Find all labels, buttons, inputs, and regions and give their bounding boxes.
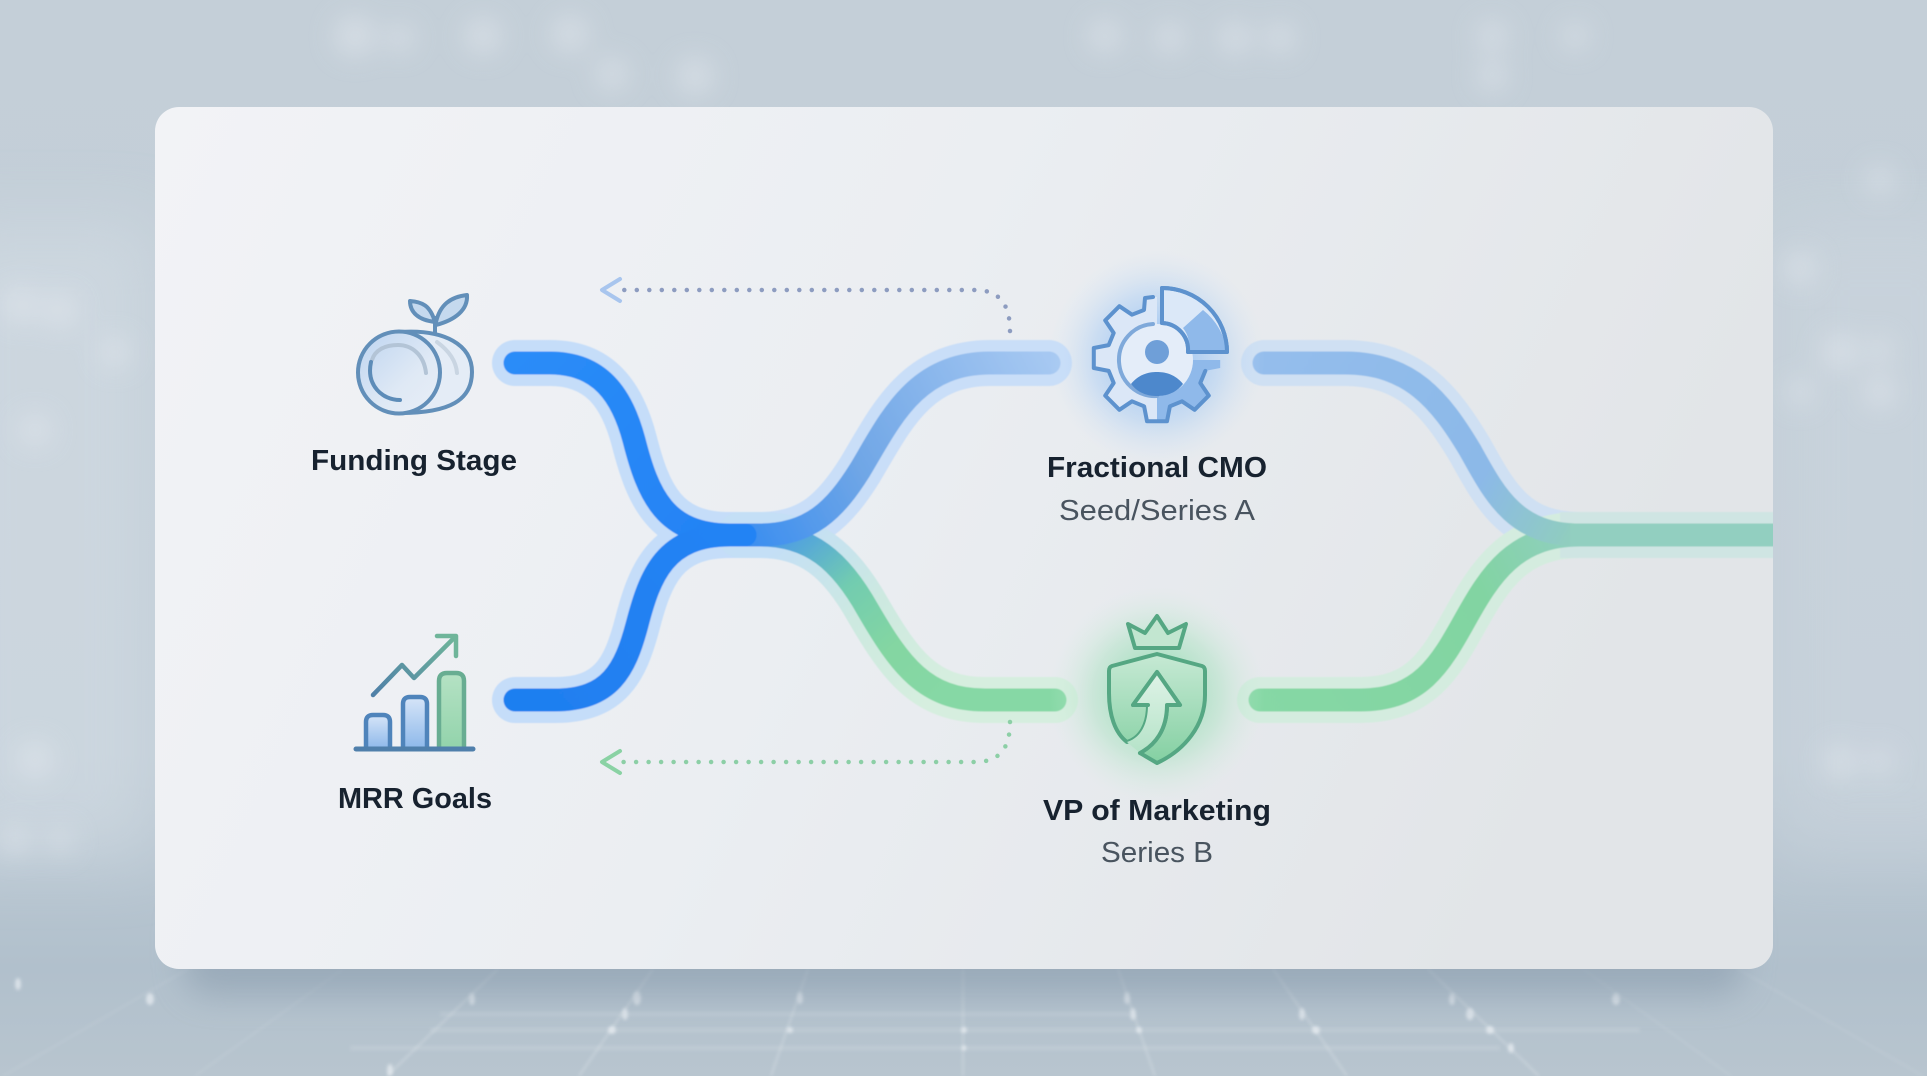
dotted return arrow: bottom	[602, 722, 1010, 773]
card shadow	[185, 900, 1743, 995]
glow: blue node	[1049, 250, 1265, 466]
label: MRR Goals: MRR Goals	[338, 783, 492, 815]
glow: green node	[1049, 587, 1265, 803]
main card panel	[155, 107, 1773, 969]
icon: shield with crown and arrow	[1109, 616, 1205, 763]
label: Seed/Series A: Seed/Series A	[1059, 495, 1256, 527]
flow diagram paths	[515, 363, 1790, 700]
icon: growth bars and arrow	[356, 636, 473, 749]
path halos	[515, 363, 1790, 700]
label: VP of Marketing: VP of Marketing	[1043, 795, 1271, 827]
path strokes	[515, 363, 1790, 700]
label: Fractional CMO: Fractional CMO	[1047, 452, 1267, 484]
gear body	[1094, 297, 1157, 421]
label: Series B: Series B	[1101, 837, 1213, 869]
dotted return arrow: top	[602, 279, 1010, 331]
label: Funding Stage: Funding Stage	[311, 445, 517, 477]
icon: peach with leaves	[358, 295, 472, 414]
icon: gear with person and chart	[1094, 288, 1227, 421]
